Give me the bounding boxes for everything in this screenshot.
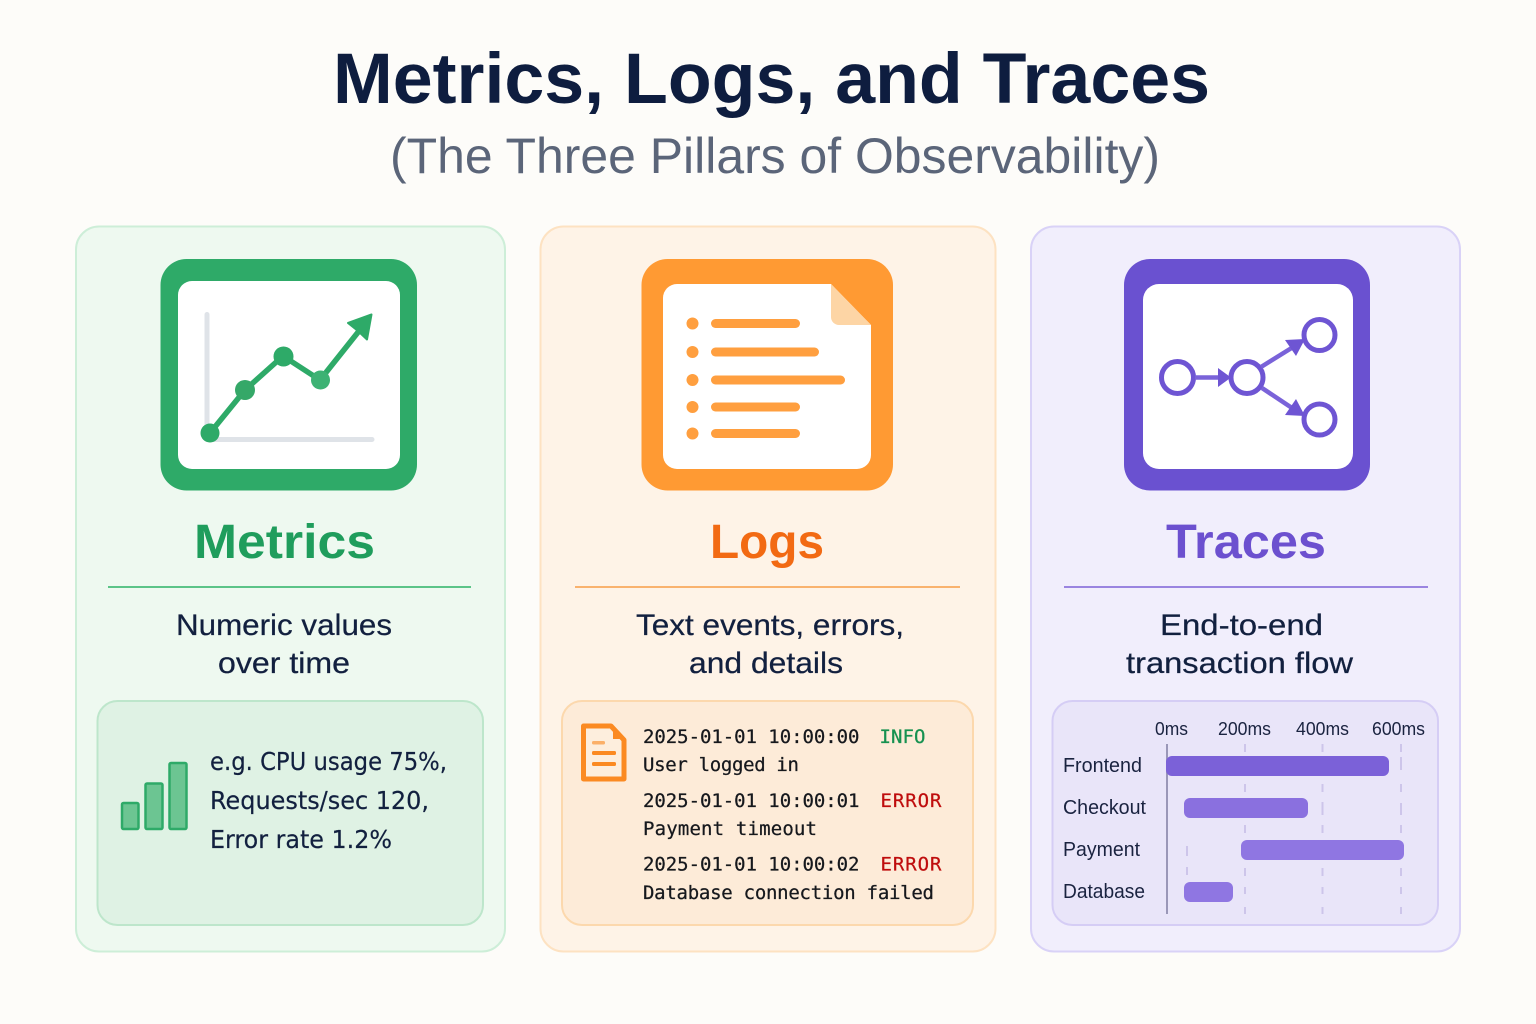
row: checkout [1063,797,1308,819]
metrics examples text [210,747,447,854]
icon: trace graph [1124,259,1370,490]
row: frontend [1063,755,1389,777]
logs description: and details [689,647,843,680]
metrics heading: Metrics [194,516,375,569]
panel: traces [1031,226,1460,952]
title: Metrics, Logs, and Traces [333,40,1210,119]
icon: metrics line chart [160,259,417,490]
metrics description: over time [218,647,350,680]
log entry: payment error: ERROR [880,790,942,812]
metrics description: Numeric values [176,609,392,642]
traces description: End-to-end [1160,609,1323,642]
icon: small document [584,726,624,779]
log entry: database error: 2025-01-01 10:00:02 [643,854,860,876]
logs panel background [540,226,996,952]
subtitle: (The Three Pillars of Observability) [390,128,1160,184]
log entry: info [643,726,926,776]
metrics panel background [76,226,505,952]
logs description: Text events, errors, [636,609,904,642]
logs heading: Logs [710,516,824,569]
row: database [1063,881,1233,903]
traces description [1126,609,1353,680]
panel: logs [540,226,996,952]
metrics example box [98,701,483,925]
log entry: payment error: Payment timeout [643,818,817,840]
metrics examples text: e.g. CPU usage 75%, [210,747,447,776]
log entry: info: 2025-01-01 10:00:00 [643,726,860,748]
icon: bar chart [122,763,186,829]
log entry: info: INFO [880,726,926,748]
log entry: payment error: 2025-01-01 10:00:01 [643,790,860,812]
log entry: database error: Database connection failed [643,882,934,904]
metrics description [176,609,392,680]
time axis labels: 600ms [1372,719,1425,739]
log entry: database error: ERROR [880,854,942,876]
row: payment: Payment [1063,839,1140,861]
time axis labels: 200ms [1218,719,1271,739]
traces panel background [1031,226,1460,952]
row: frontend: Frontend [1063,755,1142,777]
traces description: transaction flow [1126,647,1353,680]
log entry: info: User logged in [643,754,799,776]
icon: log document [642,259,893,490]
log entry: payment error [643,790,942,840]
time axis labels: 0ms [1155,719,1188,739]
row: payment [1063,839,1404,861]
metrics examples text: Requests/sec 120, [210,786,429,815]
traces waterfall chart [1052,701,1438,925]
logs example box [562,701,973,925]
time axis labels: 400ms [1296,719,1349,739]
row: database: Database [1063,881,1145,903]
time axis labels [1155,719,1425,739]
metrics examples text: Error rate 1.2% [210,825,392,854]
panel: metrics [76,226,505,952]
traces heading: Traces [1166,516,1326,569]
log entry: database error [643,854,942,904]
logs description [636,609,904,680]
row: checkout: Checkout [1063,797,1146,819]
